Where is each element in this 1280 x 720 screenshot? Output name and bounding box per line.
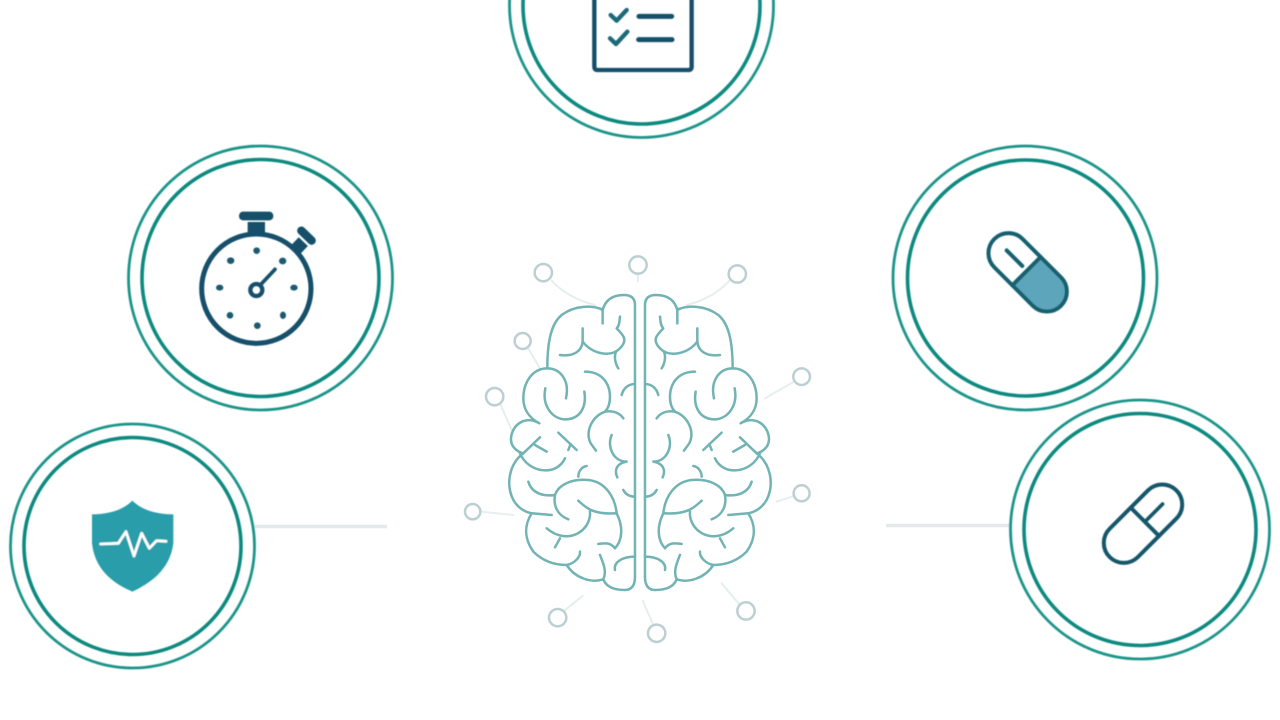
panel: stopwatch circle — [128, 146, 392, 410]
brain diagram — [465, 256, 810, 642]
panel: outline capsule circle — [1010, 400, 1270, 659]
icon: heartbeat shield — [92, 501, 173, 592]
icon: checklist — [594, 0, 692, 70]
connector line right — [886, 524, 1010, 527]
icon: outline capsule — [1096, 476, 1190, 571]
icon: stopwatch — [202, 212, 312, 343]
icon: half-filled capsule — [980, 225, 1075, 320]
left hemisphere — [509, 295, 635, 590]
right hemisphere — [645, 295, 771, 590]
circuit nodes — [465, 256, 810, 642]
connector line left — [255, 525, 387, 528]
panel: checklist circle — [510, 0, 774, 138]
panel: half-filled capsule circle — [893, 146, 1157, 410]
node connector lines — [481, 274, 794, 625]
panel: shield circle — [10, 424, 254, 668]
